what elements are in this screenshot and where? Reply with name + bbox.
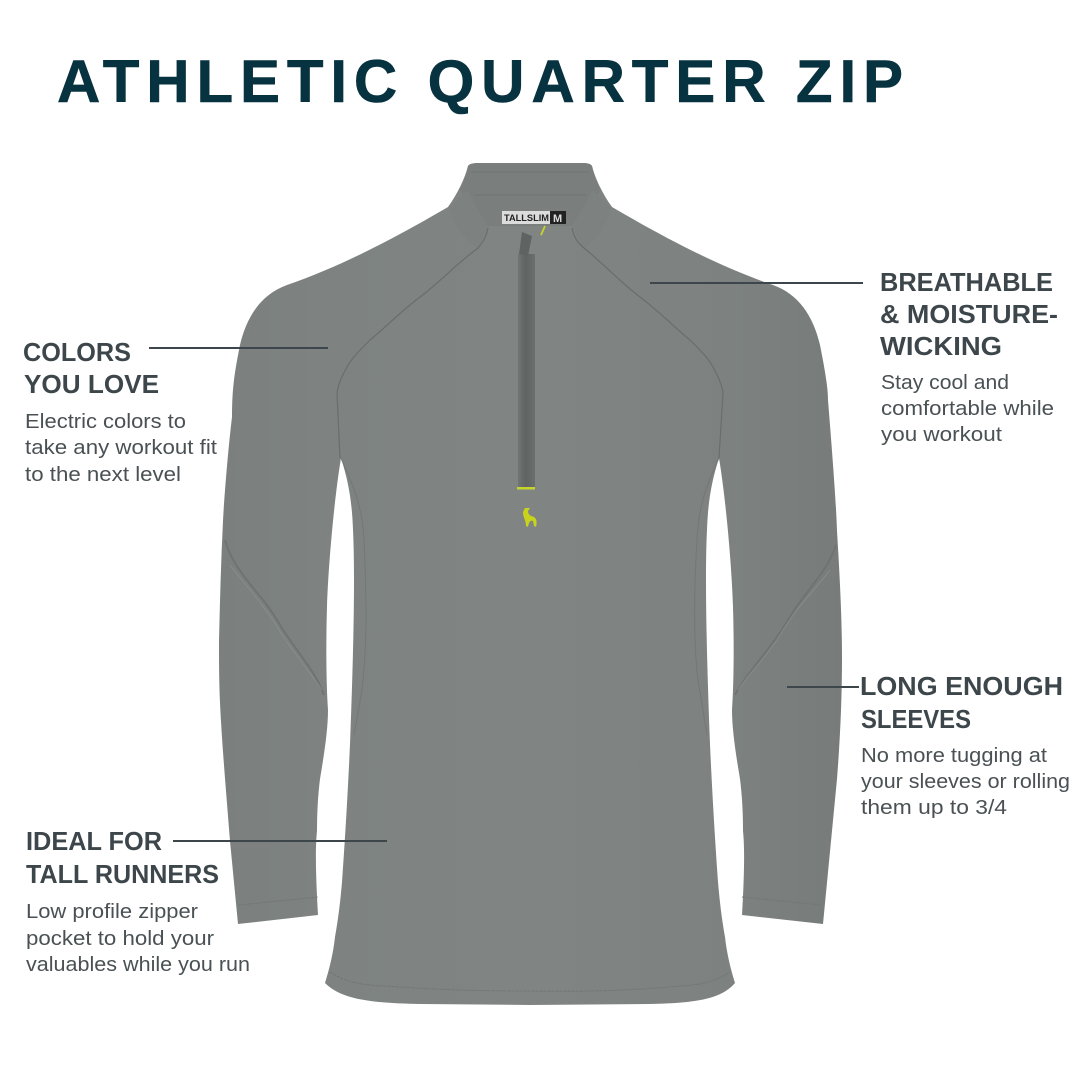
callout: ideal for tall runners: valuables while you run — [26, 953, 250, 976]
title: ATHLETIC QUARTER ZIP — [57, 48, 903, 115]
callout: colors you love: YOU LOVE — [24, 369, 159, 399]
neck label: M — [553, 213, 562, 225]
callout: long enough sleeves: them up to 3/4 — [861, 796, 1007, 819]
callout: colors you love: COLORS — [23, 337, 131, 367]
callout: breathable: you workout — [881, 423, 1002, 446]
callout: colors you love — [23, 337, 328, 486]
callout: breathable: BREATHABLE — [880, 267, 1053, 297]
callout: long enough sleeves: your sleeves or rolling — [861, 770, 1070, 793]
callout: colors you love: Electric colors to — [25, 410, 186, 433]
sleeve folds — [225, 540, 836, 695]
callout: ideal for tall runners: Low profile zipper — [26, 900, 198, 923]
shirt silhouette — [219, 163, 842, 1005]
callout: breathable: WICKING — [880, 331, 1002, 361]
cuffs and hem stitching — [239, 897, 821, 991]
callout: ideal for tall runners: pocket to hold your — [26, 927, 214, 950]
callout: breathable: Stay cool and — [881, 371, 1009, 394]
callout: colors you love: take any workout fit — [25, 436, 217, 459]
collar inner back — [459, 163, 601, 226]
shirt illustration — [219, 163, 842, 1005]
neck label: TALLSLIM — [504, 213, 549, 223]
callout: ideal for tall runners — [26, 826, 387, 976]
callout: ideal for tall runners: IDEAL FOR — [26, 826, 162, 856]
raglan seams — [337, 228, 723, 458]
callout: breathable: comfortable while — [881, 397, 1054, 420]
callout: ideal for tall runners: TALL RUNNERS — [26, 859, 219, 889]
callout: long enough sleeves — [787, 671, 1070, 819]
callout: long enough sleeves: LONG ENOUGH — [860, 671, 1063, 701]
collar front flaps — [448, 190, 488, 248]
callout: colors you love: to the next level — [25, 463, 181, 486]
logo — [523, 508, 537, 527]
zipper — [517, 226, 545, 490]
callout: long enough sleeves: SLEEVES — [861, 704, 971, 734]
callout: breathable: & MOISTURE- — [880, 299, 1058, 329]
callout: breathable — [650, 267, 1058, 446]
side seams — [341, 458, 719, 735]
neck label — [502, 211, 566, 225]
callout: long enough sleeves: No more tugging at — [861, 744, 1047, 767]
